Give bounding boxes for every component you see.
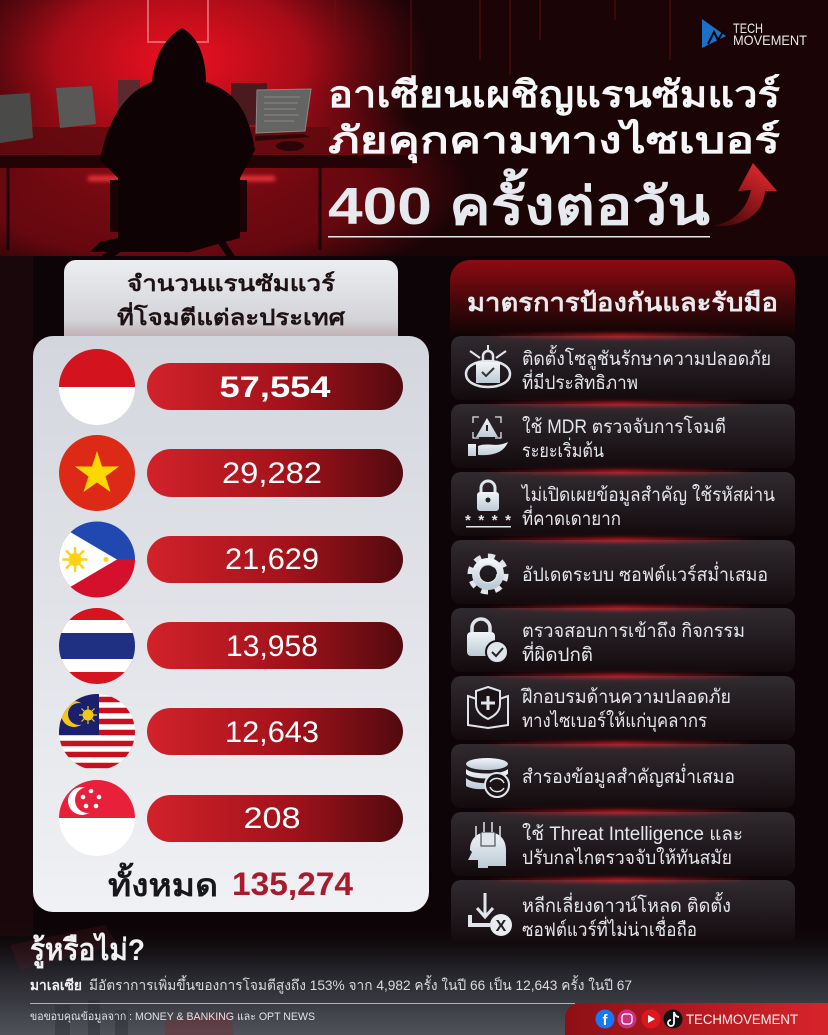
panel heading	[64, 260, 398, 345]
measure 2	[451, 402, 795, 468]
icon: up arrow	[712, 163, 777, 226]
total	[108, 862, 353, 903]
flag: Malaysia	[59, 694, 135, 770]
measure 4	[451, 538, 795, 604]
bar: Singapore: 208	[244, 802, 300, 835]
measure 3: ไม่เปิดเผยข้อมูลสำคัญ ใช้รหัสผ่าน	[520, 484, 775, 506]
measure 2: ใช้ MDR ตรวจจับการโจมตี	[522, 415, 726, 438]
measure 8	[451, 810, 795, 876]
measure 6	[451, 674, 795, 740]
did you know note: มีอัตราการเพิ่มขึ้นของการโจมตีสูงถึง 153% จาก 4,982 ครั้ง ในปี 66 เป็น 12,643 ครั้ง ในปี 67	[89, 975, 632, 994]
flag: Thailand	[59, 608, 135, 684]
bar: Vietnam	[147, 449, 403, 497]
measure 9	[451, 878, 795, 944]
title: อาเซียนเผชิญแรนซัมแวร์	[328, 74, 780, 116]
measure 5	[451, 606, 795, 672]
photo: hacker at desk	[0, 28, 412, 258]
total: ทั้งหมด	[108, 862, 218, 903]
bar: Philippines	[147, 536, 403, 583]
flag: Vietnam	[59, 435, 135, 511]
logo: TECH	[733, 20, 763, 36]
measure 3	[451, 470, 795, 536]
bar: Vietnam: 29,282	[222, 457, 322, 490]
social bar: TECHMOVEMENT	[686, 1011, 798, 1027]
logo: MOVEMENT	[733, 32, 807, 48]
flag: Singapore	[59, 780, 135, 856]
measure 7	[451, 742, 795, 808]
measures heading: มาตรการป้องกันและรับมือ	[467, 289, 778, 317]
panel heading: ที่โจมตีแต่ละประเทศ	[117, 301, 346, 330]
measure 2: ระยะเริ่มต้น	[522, 437, 604, 462]
bar: Indonesia: 57,554	[220, 371, 331, 404]
did you know note	[30, 932, 632, 1004]
bar: Philippines: 21,629	[225, 543, 319, 576]
measure 9: หลีกเลี่ยงดาวน์โหลด ติดตั้ง	[522, 892, 731, 917]
total: 135,274	[232, 866, 353, 902]
measure 1: ติดตั้งโซลูชันรักษาความปลอดภัย	[522, 345, 771, 370]
bar: Thailand: 13,958	[226, 630, 318, 663]
did you know note: มาเลเซีย	[30, 977, 82, 993]
measure 3: ที่คาดเดายาก	[522, 505, 621, 530]
bar: Singapore	[147, 795, 403, 842]
measure 1: ที่มีประสิทธิภาพ	[522, 369, 638, 394]
measure 3: ****	[465, 512, 511, 529]
measure 4: อัปเดตระบบ ซอฟต์แวร์สม่ำเสมอ	[522, 561, 768, 586]
measure 1	[451, 334, 795, 400]
measure 9: ซอฟต์แวร์ที่ไม่น่าเชื่อถือ	[522, 916, 697, 941]
measure 8: ใช้ Threat Intelligence และ	[522, 823, 743, 845]
title: 400 ครั้งต่อวัน	[328, 168, 711, 236]
measure 6: ทางไซเบอร์ให้แก่บุคลากร	[522, 710, 707, 733]
bar: Thailand	[147, 622, 403, 669]
panel heading: จำนวนแรนซัมแวร์	[127, 271, 335, 296]
logo	[702, 19, 807, 48]
panel: protective measures	[450, 260, 795, 944]
flag: Philippines	[59, 522, 135, 598]
measures heading	[450, 260, 795, 335]
measure 9: X	[496, 918, 507, 935]
measure 7: สำรองข้อมูลสำคัญสม่ำเสมอ	[522, 763, 735, 788]
bar: Malaysia: 12,643	[225, 716, 319, 749]
measure 5: ที่ผิดปกติ	[522, 641, 593, 666]
bar: Indonesia	[147, 363, 403, 410]
social bar: f	[602, 1012, 608, 1029]
source credit: ขอขอบคุณข้อมูลจาก : MONEY & BANKING และ OPT NEWS	[30, 1011, 315, 1023]
measure 8: ปรับกลไกตรวจจับให้ทันสมัย	[522, 847, 732, 869]
title	[328, 74, 780, 238]
panel: ransomware counts	[33, 260, 429, 912]
title: ภัยคุกคามทางไซเบอร์	[328, 118, 780, 164]
panel card	[33, 336, 429, 912]
did you know note: รู้หรือไม่?	[30, 932, 145, 969]
measure 6: ฝึกอบรมด้านความปลอดภัย	[520, 687, 731, 708]
flag: Indonesia	[59, 349, 135, 425]
bar: Malaysia	[147, 708, 403, 755]
social bar	[565, 1003, 828, 1035]
measure 5: ตรวจสอบการเข้าถึง กิจกรรม	[522, 621, 745, 642]
